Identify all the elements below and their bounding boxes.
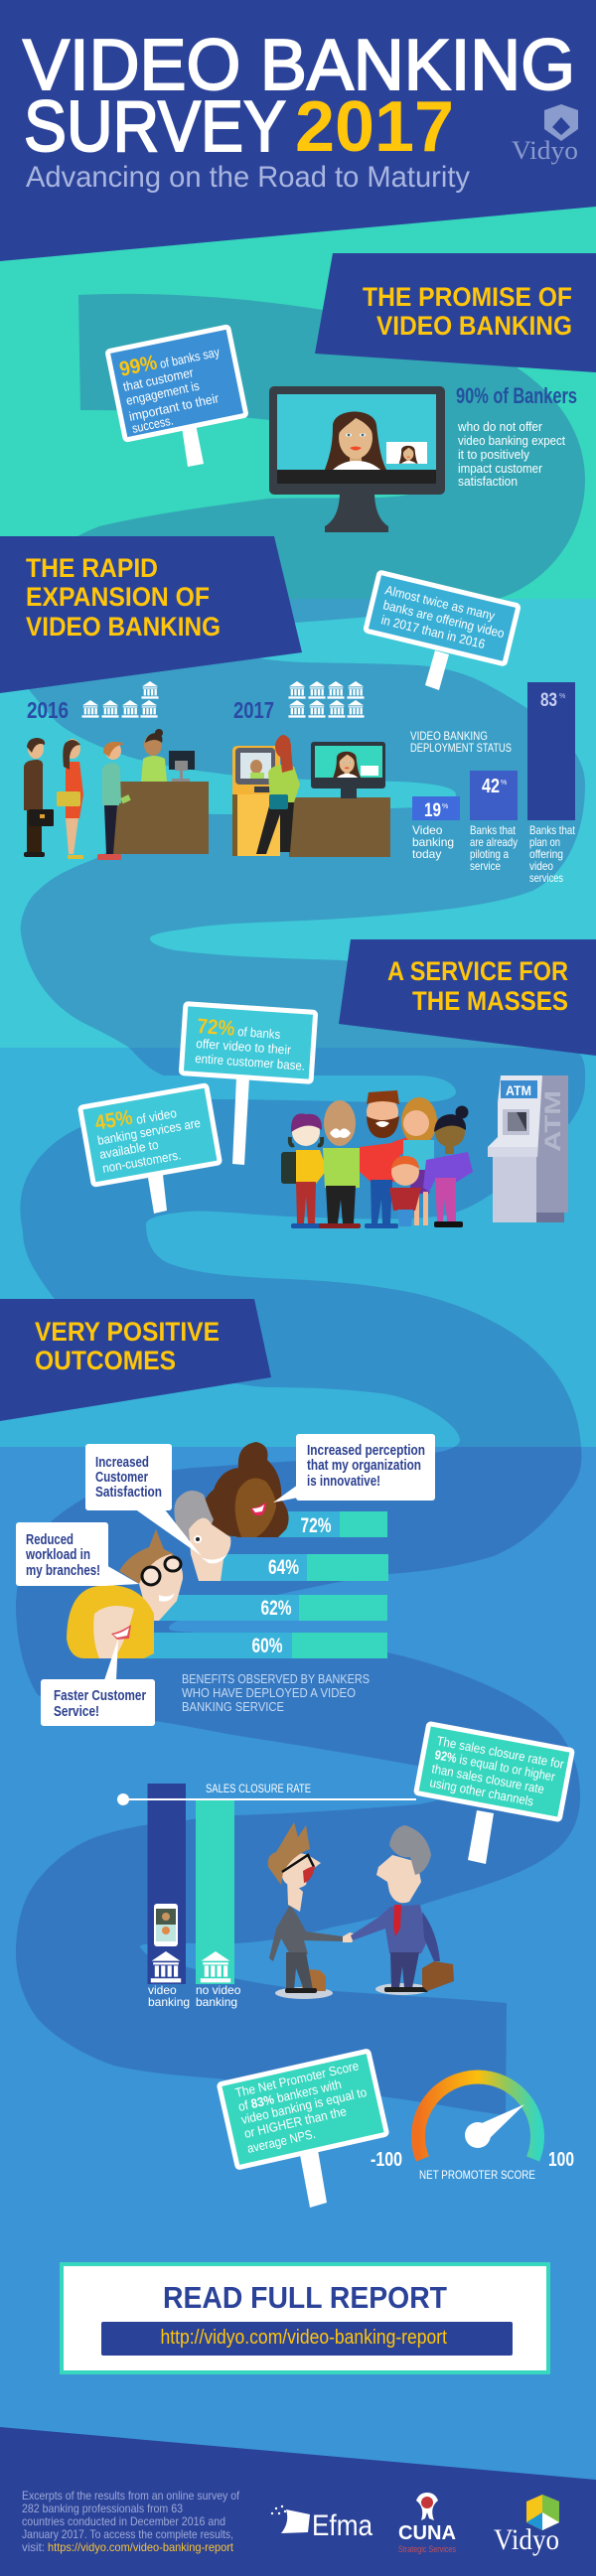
chart: benefit bars: 64% — [268, 1556, 299, 1579]
callout: faster customer service: Service! — [54, 1704, 99, 1720]
sign: net promoter score: or HIGHER than the — [242, 2103, 348, 2141]
illustration: video banking kiosk and desk 2017 — [232, 735, 390, 857]
heading: the promise of video banking — [315, 253, 596, 372]
sign: sales closure: than sales closure rate — [430, 1761, 545, 1796]
chart: deployment status: are already — [470, 835, 518, 849]
sign: net promoter score: average NPS. — [245, 2126, 317, 2156]
footer band — [0, 2427, 596, 2576]
monitor with video agent — [269, 386, 445, 532]
heading: the rapid expansion: EXPANSION OF — [26, 582, 210, 612]
subtitle: Advancing on the Road to Maturity — [26, 161, 470, 194]
chart: benefit bars: 62% — [260, 1597, 292, 1620]
illustration: ATM: ATM — [506, 1082, 531, 1098]
sign: sales closure — [413, 1721, 575, 1864]
chart: benefit bars: 72% — [300, 1514, 332, 1537]
sign: 45 percent — [77, 1082, 223, 1214]
footer text — [22, 2489, 240, 2554]
footer text: January 2017. To access the complete results, — [22, 2527, 233, 2541]
sign: 99 percent: success. — [131, 413, 175, 436]
stat: 90 percent of bankers: satisfaction — [458, 474, 518, 489]
call to action: read full report: http://vidyo.com/video-banking-report — [161, 2327, 447, 2349]
logo: CUNA: Strategic Services — [398, 2544, 456, 2554]
background bands — [0, 207, 596, 2115]
sign: sales closure: 92% is equal to or higher — [433, 1747, 557, 1785]
chart: deployment status: % — [442, 803, 448, 810]
heading: a service for the masses: A SERVICE FOR — [387, 956, 568, 986]
chart: deployment status: 42 — [482, 776, 500, 797]
chart: deployment status: video — [529, 859, 553, 873]
sign: 45 percent: of video — [135, 1105, 178, 1127]
illustration: branch queue 2016 — [24, 729, 209, 860]
callout: increased customer satisfaction — [85, 1444, 202, 1556]
illustration: handshake — [268, 1822, 454, 1999]
stat: 90 percent of bankers: it to positively — [458, 447, 529, 462]
stat: 90 percent of bankers — [456, 383, 577, 489]
callout: reduced workload — [16, 1522, 139, 1586]
heading: a service for the masses: THE MASSES — [412, 986, 568, 1016]
sign: almost twice as many: banks are offering video — [381, 597, 506, 641]
stat: 90 percent of bankers: impact customer — [458, 461, 543, 476]
callout: reduced workload: Reduced — [26, 1532, 74, 1548]
chart: deployment status: Banks that — [470, 823, 517, 837]
heading: very positive outcomes: VERY POSITIVE — [35, 1317, 220, 1347]
callout: increased perception — [273, 1434, 435, 1503]
call to action: read full report — [62, 2264, 548, 2372]
heading: the promise of video banking: THE PROMISE OF — [363, 282, 572, 312]
chart: NPS gauge: -100 — [371, 2149, 402, 2171]
callout: reduced workload: workload in — [25, 1547, 90, 1563]
footer text: visit: — [22, 2540, 45, 2554]
sign: 99 percent — [104, 324, 249, 467]
chart: deployment status: services — [529, 871, 563, 885]
heading: the rapid expansion: VIDEO BANKING — [26, 612, 221, 642]
chart: deployment status — [410, 682, 576, 885]
callout: increased perception: is innovative! — [307, 1474, 380, 1490]
heading: very positive outcomes — [0, 1299, 271, 1421]
sign: 45 percent: non-customers. — [101, 1147, 182, 1176]
sign: 99 percent: that customer — [122, 364, 196, 394]
stat: 90 percent of bankers: video banking expect — [458, 433, 565, 448]
logo: Vidyo header: Vidyo — [512, 136, 578, 165]
chart: NPS gauge — [371, 2076, 574, 2182]
sign: almost twice as many: Almost twice as many — [383, 582, 497, 624]
sign: 99 percent: of banks say — [159, 344, 222, 371]
footer text: countries conducted in December 2016 and — [22, 2514, 225, 2528]
sign: 99 percent: engagement is — [125, 378, 201, 408]
chart: sales closure rate — [117, 1782, 416, 2009]
caption: benefits observed: WHO HAVE DEPLOYED A VIDEO — [182, 1686, 356, 1700]
title: VIDEO BANKING — [23, 26, 575, 105]
illustration: ATM — [488, 1075, 568, 1222]
label: 2016 with bank icons — [27, 681, 159, 723]
sign: almost twice as many — [363, 569, 522, 690]
chart: deployment status: banking — [412, 835, 454, 849]
logo: Efma — [271, 2505, 372, 2542]
sign: net promoter score — [216, 2048, 390, 2208]
chart: deployment status: VIDEO BANKING — [410, 729, 488, 743]
sign: 72 percent: 72% — [197, 1015, 235, 1041]
chart: NPS gauge: 100 — [548, 2149, 574, 2171]
sign: net promoter score: The Net Promoter Score — [233, 2058, 361, 2100]
title: 2017 — [295, 87, 454, 167]
logo: Vidyo header — [512, 104, 578, 165]
callout: increased perception: Increased perception — [307, 1443, 425, 1459]
chart: sales closure rate: banking — [148, 1995, 190, 2009]
logo: Vidyo footer — [494, 2495, 559, 2556]
callout: faster customer service — [41, 1639, 155, 1726]
chart: benefit bars: 60% — [252, 1635, 283, 1657]
sign: net promoter score: video banking is equal to — [239, 2084, 369, 2127]
chart: benefit bars — [124, 1511, 388, 1658]
sign: 99 percent: 99% — [117, 351, 159, 381]
header band — [0, 0, 596, 261]
chart: sales closure rate: SALES CLOSURE RATE — [206, 1782, 311, 1795]
chart: deployment status: 83 — [540, 690, 557, 711]
sign: sales closure: using other channels — [428, 1775, 535, 1809]
sign: almost twice as many: in 2017 than in 2016 — [379, 612, 487, 651]
sign: 45 percent: 45% — [93, 1106, 135, 1135]
chart: deployment status: % — [559, 693, 565, 700]
sign: 72 percent — [179, 1001, 318, 1165]
chart: deployment status: piloting a — [470, 847, 509, 861]
sign: 99 percent: important to their — [128, 390, 221, 424]
heading: the rapid expansion: THE RAPID — [26, 553, 158, 583]
logo: CUNA: CUNA — [398, 2522, 456, 2544]
label: 2017 with bank icons — [233, 681, 365, 723]
chart: NPS gauge: NET PROMOTER SCORE — [419, 2168, 535, 2182]
callout: increased customer satisfaction: Satisfaction — [95, 1485, 162, 1501]
chart: sales closure rate: no video — [196, 1983, 241, 1997]
illustration: banker heads — [67, 1442, 289, 1658]
chart: deployment status: today — [412, 847, 441, 861]
chart: deployment status: plan on — [529, 835, 560, 849]
heading: the rapid expansion — [0, 536, 302, 693]
illustration: family — [281, 1090, 473, 1228]
logo: Efma: Efma — [312, 2509, 372, 2542]
callout: increased customer satisfaction: Increased — [95, 1455, 149, 1471]
callout: increased customer satisfaction: Customer — [95, 1470, 148, 1486]
heading: very positive outcomes: OUTCOMES — [35, 1346, 176, 1375]
caption: benefits observed: BENEFITS OBSERVED BY BANKERS — [182, 1672, 370, 1686]
chart: deployment status: offering — [529, 847, 563, 861]
heading: the promise of video banking: VIDEO BANKING — [376, 311, 572, 341]
sign: 72 percent: offer video to their — [196, 1036, 292, 1058]
sign: net promoter score: of 83% bankers with — [236, 2076, 343, 2114]
sign: sales closure: The sales closure rate for — [435, 1733, 566, 1772]
chart: deployment status: % — [501, 780, 507, 787]
title: SURVEY — [24, 87, 286, 167]
logo: Vidyo footer: Vidyo — [494, 2523, 559, 2556]
sign: 72 percent: entire customer base. — [195, 1051, 306, 1073]
heading: a service for the masses — [339, 939, 596, 1056]
title — [23, 26, 575, 167]
chart: sales closure rate: banking — [196, 1995, 237, 2009]
callout: faster customer service: Faster Customer — [54, 1688, 146, 1704]
callout: reduced workload: my branches! — [26, 1563, 100, 1579]
logo: CUNA — [398, 2493, 456, 2554]
call to action: read full report: READ FULL REPORT — [163, 2280, 447, 2315]
footer text: Excerpts of the results from an online survey of — [22, 2489, 240, 2503]
footer text: 282 banking professionals from 63 — [22, 2502, 183, 2515]
chart: sales closure rate: video — [148, 1983, 177, 1997]
chart: deployment status: Video — [412, 823, 443, 837]
chart: deployment status: Banks that — [529, 823, 576, 837]
sign: 45 percent: available to — [98, 1137, 160, 1162]
chart: deployment status: service — [470, 859, 501, 873]
footer text: https://vidyo.com/video-banking-report — [48, 2540, 234, 2554]
chart: deployment status: DEPLOYMENT STATUS — [410, 741, 512, 755]
callout: increased perception: that my organization — [307, 1458, 421, 1474]
label: 2016 with bank icons: 2016 — [27, 697, 69, 723]
caption: benefits observed — [182, 1672, 370, 1714]
label: 2017 with bank icons: 2017 — [233, 697, 274, 723]
caption: benefits observed: BANKING SERVICE — [182, 1700, 284, 1714]
sign: 72 percent: of banks — [237, 1024, 281, 1042]
sign: 45 percent: banking services are — [96, 1115, 202, 1148]
stat: 90 percent of bankers: who do not offer — [457, 419, 543, 434]
chart: deployment status: 19 — [424, 800, 441, 821]
illustration: ATM: ATM — [540, 1090, 565, 1152]
